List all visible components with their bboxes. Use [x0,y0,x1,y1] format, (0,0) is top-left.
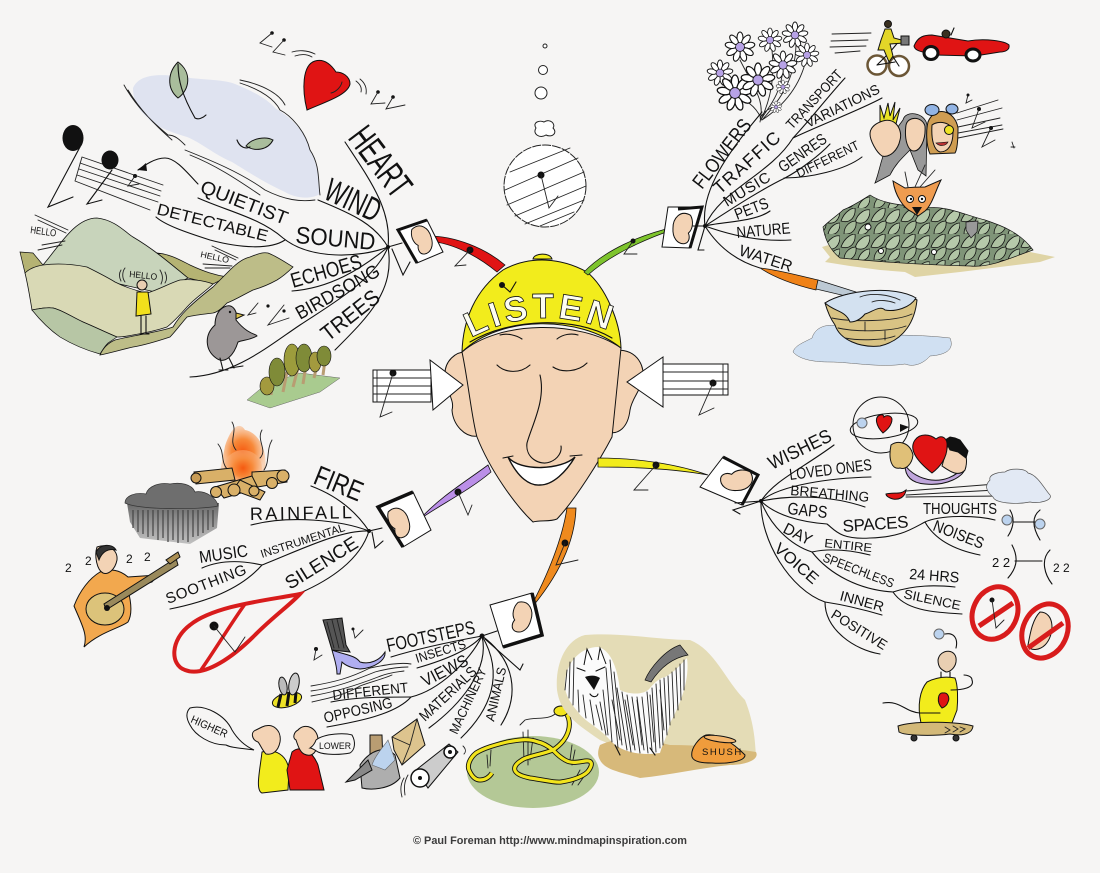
branch: purple [420,465,491,519]
icon: thought gap [1002,510,1045,540]
icon: higher speech bubble: HIGHER [189,714,229,741]
icon: embracing couple with heart [890,435,968,484]
panel: middle right branches [700,426,997,654]
right ear [595,350,643,433]
ear box [369,492,431,548]
mid band [25,264,213,337]
HELLO right: HELLO [200,249,230,265]
label: trees: TREES [316,284,385,346]
icon: skateboarder [883,629,973,741]
branch: yellow [598,458,708,490]
central head [444,254,644,522]
icon: campfire [191,422,289,500]
icon: bumble bee and trails [271,663,411,711]
cap [533,254,552,259]
central head: LISTEN [462,293,614,338]
lower left green [32,308,117,354]
icon: music staff and notes [48,125,198,210]
face [462,327,621,522]
branch: orange [528,508,578,612]
label: opposing: OPPOSING [322,695,394,727]
icon: bird [207,303,289,370]
long hair [875,114,927,183]
label: different: DIFFERENT [794,137,861,181]
back left hill [20,252,43,273]
icon: red silence teardrop [174,594,300,672]
icon: orbiting heart and wish [849,397,919,453]
ear box [662,207,705,250]
label: animals: ANIMALS [482,665,509,723]
icon: three singing faces [870,94,1015,183]
branch lines [703,78,882,268]
ear box [700,457,761,514]
label: positive: POSITIVE [828,606,890,653]
icon: shaggy dog [565,645,688,755]
label: footsteps: FOOTSTEPS [385,618,477,657]
icon: materials pile [346,719,425,789]
icon: heart [260,31,405,110]
icon: snake on grass [467,706,599,808]
icon: higher speech bubble [187,707,254,750]
branch lines [156,142,390,377]
label: voice: VOICE [770,540,822,588]
sound staff [957,100,1003,138]
icon: shush bowl: SHUSH [702,747,743,758]
icon: noise gap: 2 2 [992,555,1010,570]
icon: water basket and brush [760,268,917,346]
label: water: WATER [737,243,794,276]
label: music: MUSIC [720,169,774,210]
icon: cyclist [830,20,909,76]
icon: trees [247,344,340,408]
panel: top right branches [662,66,882,276]
label: detectable: DETECTABLE [155,201,270,245]
label: genres: GENRES [776,131,830,176]
icon: banjo player: 2 [65,561,72,575]
left staff and arrow [373,360,463,417]
label: wind: WIND [319,171,387,229]
right staff and arrow [627,357,728,415]
label: noises: NOISES [931,518,986,553]
thought bubbles above head [504,44,586,227]
label: breathing: BREATHING [790,482,870,505]
label: rainfall: RAINFALL [250,502,352,524]
icon: high heeled boot [314,618,385,674]
label: wishes: WISHES [765,426,835,474]
icon: banjo player: 2 [126,552,133,566]
green hill [43,218,188,293]
label: music: MUSIC [198,541,249,567]
label: birdsong: BIRDSONG [292,261,384,324]
icon: shush bowl [692,734,745,763]
label: entire: ENTIRE [824,536,873,555]
branch: heart / sound in red [428,236,505,272]
ear box [388,220,443,275]
icon: belt machine [401,744,465,797]
icon: noise gap [992,545,1070,584]
left ear [445,352,490,436]
spiky haired face [880,102,900,125]
panel: bottom branches [322,593,542,738]
icon: no ear sign [1013,596,1077,666]
panel: middle left branches [163,460,431,609]
label: heart: HEART [341,118,420,205]
label: silence: SILENCE [902,586,963,613]
label: spaces: SPACES [842,512,909,536]
credit line: © Paul Foreman http://www.mindmapinspiration.com [413,835,687,847]
icon: hilly landscape with figure [20,215,293,355]
cap lettering [471,318,617,338]
icon: lips and breath cloud [886,469,1050,503]
icon: banjo player: 2 [144,550,151,564]
label: traffic: TRAFFIC [709,128,784,198]
label: materials: MATERIALS [416,663,480,725]
icon: two men talking [252,725,324,793]
label: pets: PETS [732,195,771,224]
label: gaps: GAPS [787,499,828,522]
ear box [482,593,542,670]
icon: no music sign [964,579,1026,647]
icon: red car [914,28,1009,61]
branch lines [759,445,995,654]
HELLO speech: HELLO [129,269,158,282]
label: quietist: QUIETIST [197,177,291,230]
label: soothing: SOOTHING [163,561,249,608]
label: machinery: MACHINERY [446,665,490,736]
label: thoughts: THOUGHTS [923,501,997,518]
label: sound: SOUND [294,222,377,256]
facial features [497,334,587,485]
label: fire: FIRE [310,460,368,507]
icon: dog ground [598,739,757,778]
label: insects: INSECTS [413,636,468,666]
label: flowers: FLOWERS [689,115,756,193]
label: echoes: ECHOES [288,251,365,293]
label: variations: VARIATIONS [802,81,882,131]
blonde face with bow [927,112,958,154]
label: silence: SILENCE [282,533,362,594]
icon: water puddle [793,325,951,365]
label: transport: TRANSPORT [782,66,846,132]
icon: noise gap: 2 2 [1053,561,1070,575]
label: loved ones: LOVED ONES [788,457,873,484]
icon: fox in bush [823,165,1033,266]
icon: lower speech bubble [310,734,354,754]
label: speechless: SPEECHLESS [821,550,897,591]
branch lines [170,486,371,609]
label: views: VIEWS [418,651,471,691]
panel: top left branches [155,118,443,377]
HELLO left: HELLO [30,225,57,240]
label: day: DAY [780,520,815,549]
label: nature: NATURE [736,220,791,242]
branch lines [327,634,512,738]
icon: ground under bush [822,240,1055,277]
icon: banjo player [65,545,180,647]
label: different: DIFFERENT [332,679,409,703]
branch: green [584,227,675,275]
label: inner: INNER [838,587,886,615]
icon: rain cloud [125,483,219,544]
icon: wind cloud with leaves [124,62,320,201]
label: instrumental: INSTRUMENTAL [259,522,347,561]
icon: flower bouquet [707,22,819,122]
label: 24 hrs: 24 HRS [909,566,960,586]
icon: banjo player: 2 [85,554,92,568]
icon: dog background [557,634,756,760]
bottom olive ground and right hill [100,253,293,355]
icon: lower speech bubble: LOWER [319,741,351,752]
figure in yellow coat [136,280,151,334]
back right hill [157,253,227,284]
